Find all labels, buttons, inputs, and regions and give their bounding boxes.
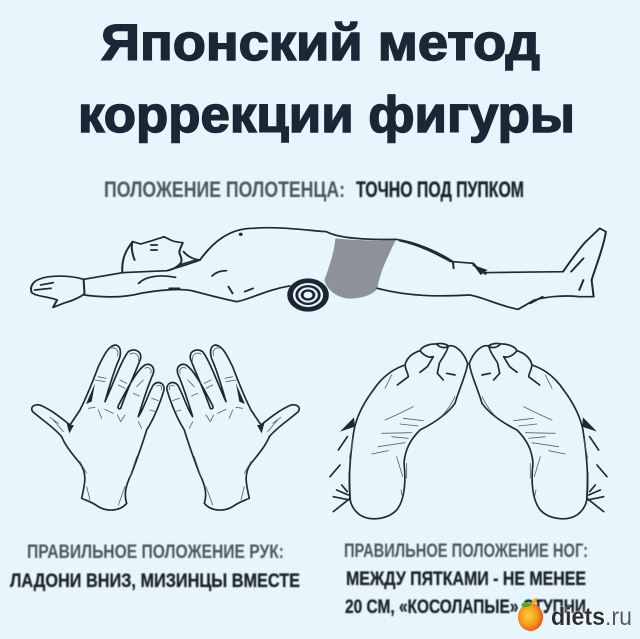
illustration: hands palms down	[32, 345, 299, 510]
caption: hands: ПРАВИЛЬНОЕ ПОЛОЖЕНИЕ РУК:	[27, 541, 284, 563]
rolled towel	[287, 278, 329, 312]
title	[78, 14, 575, 143]
title: коррекции фигуры	[78, 86, 575, 143]
body outline	[31, 228, 606, 309]
caption: hands	[10, 541, 300, 592]
shorts	[324, 238, 396, 298]
illustration: feet soles	[330, 343, 607, 519]
icon: apple	[518, 598, 543, 631]
subtitle: towel position: ТОЧНО ПОД ПУПКОМ	[356, 177, 524, 202]
left foot	[330, 343, 468, 519]
left hand	[32, 345, 164, 510]
right foot	[469, 343, 607, 519]
illustration: man lying on rolled towel	[31, 228, 606, 312]
caption: feet	[344, 540, 588, 618]
caption: feet: 20 СМ, «КОСОЛАПЫЕ» СТУПНИ	[345, 596, 586, 618]
title: Японский метод	[101, 14, 540, 71]
caption: feet: МЕЖДУ ПЯТКАМИ - НЕ МЕНЕЕ	[346, 568, 586, 590]
subtitle: towel position: ПОЛОЖЕНИЕ ПОЛОТЕНЦА:	[104, 177, 345, 202]
caption: hands: ЛАДОНИ ВНИЗ, МИЗИНЦЫ ВМЕСТЕ	[10, 570, 300, 592]
right hand	[167, 345, 299, 510]
watermark text: diets.ru	[551, 603, 632, 631]
watermark: diets.ru	[518, 598, 632, 631]
